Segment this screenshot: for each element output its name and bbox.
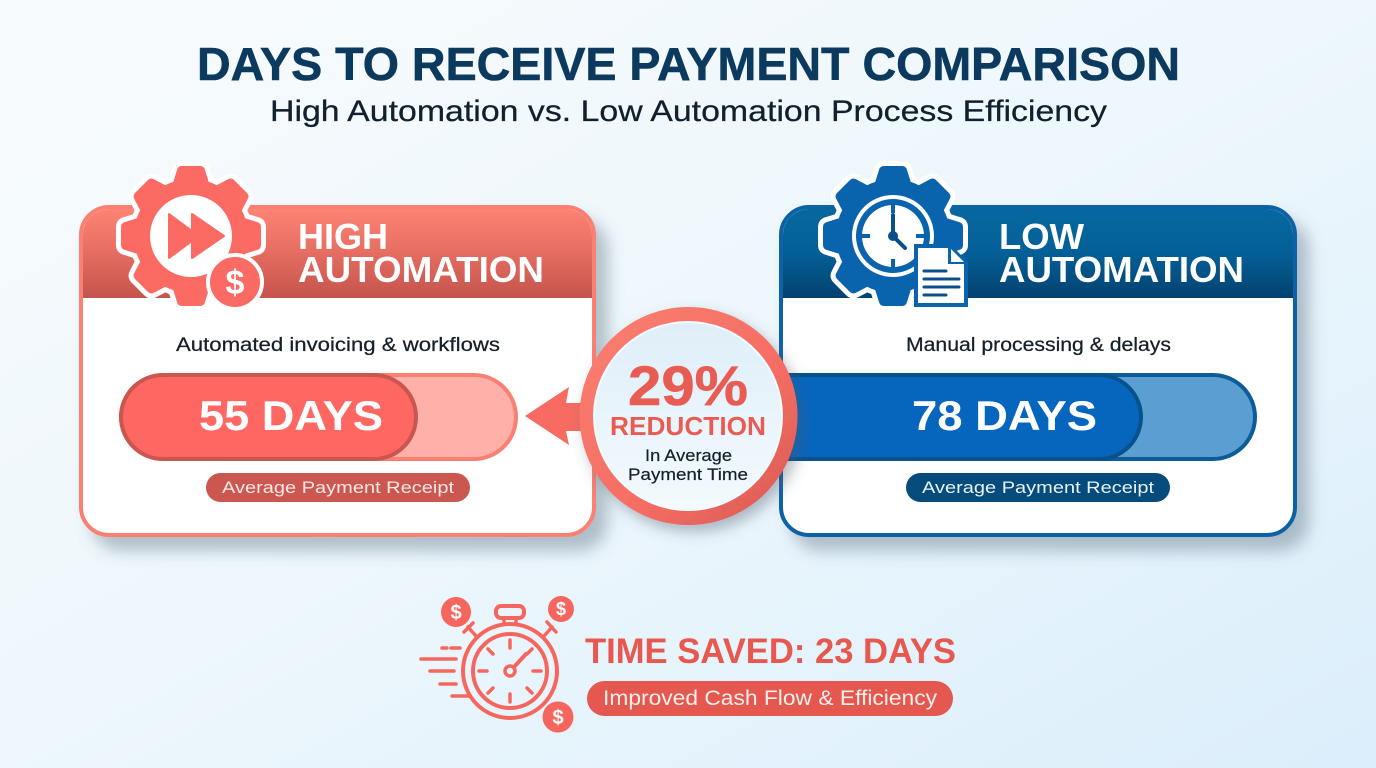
bar: 55 days: 55 DAYS	[199, 392, 383, 439]
icon: gear with clock and document	[823, 166, 968, 307]
card body: low automation	[781, 207, 1295, 535]
header band: high automation	[83, 209, 592, 298]
coins	[441, 596, 574, 732]
arrow: pointing to high automation	[525, 387, 600, 445]
heading: high automation: AUTOMATION	[298, 249, 544, 290]
header band: low automation	[783, 209, 1293, 298]
icon: gear with fast-forward and dollar	[121, 166, 262, 309]
coins: $	[556, 599, 566, 619]
heading: low automation	[999, 216, 1244, 290]
label pill: average payment receipt	[906, 473, 1170, 502]
stat caption: In Average	[645, 447, 732, 465]
stat: 29%: 29%	[628, 354, 748, 417]
coins: $	[552, 707, 564, 729]
icon: gear with fast-forward and dollar: $	[226, 264, 245, 302]
pill: improved cash flow and efficiency: Improved Cash Flow & Efficiency	[603, 687, 938, 710]
bar: 55 days	[121, 375, 516, 459]
callout: 29% reduction	[525, 307, 798, 525]
panel: low automation	[781, 166, 1295, 535]
bar: 78 days: 78 DAYS	[912, 392, 1097, 439]
icon: stopwatch with coins and speed lines	[421, 596, 574, 732]
speed lines	[421, 648, 470, 696]
pill: improved cash flow and efficiency	[587, 681, 953, 716]
label pill: average payment receipt: Average Payment Receipt	[922, 478, 1154, 497]
title: DAYS TO RECEIVE PAYMENT COMPARISON	[197, 38, 1180, 90]
heading: high automation: HIGH	[298, 216, 388, 257]
heading: time saved: TIME SAVED: 23 DAYS	[585, 632, 956, 671]
description: low automation: Manual processing & delays	[906, 335, 1171, 356]
card body: high automation	[81, 207, 594, 535]
label pill: average payment receipt: Average Payment Receipt	[222, 478, 454, 497]
bar: 78 days	[785, 375, 1255, 459]
heading: low automation: AUTOMATION	[999, 249, 1244, 290]
coins: $	[450, 602, 462, 624]
stat label: reduction: REDUCTION	[610, 411, 766, 441]
stopwatch	[463, 606, 557, 718]
stat caption	[628, 447, 748, 484]
subtitle: High Automation vs. Low Automation Process Efficiency	[270, 95, 1107, 128]
heading: low automation: LOW	[999, 216, 1084, 257]
description: high automation: Automated invoicing & workflows	[176, 335, 500, 356]
label pill: average payment receipt	[206, 473, 470, 502]
inner disc	[594, 322, 782, 510]
heading: high automation	[298, 216, 544, 290]
panel: high automation	[81, 166, 594, 535]
ring	[580, 307, 798, 525]
stat caption: Payment Time	[628, 466, 748, 484]
